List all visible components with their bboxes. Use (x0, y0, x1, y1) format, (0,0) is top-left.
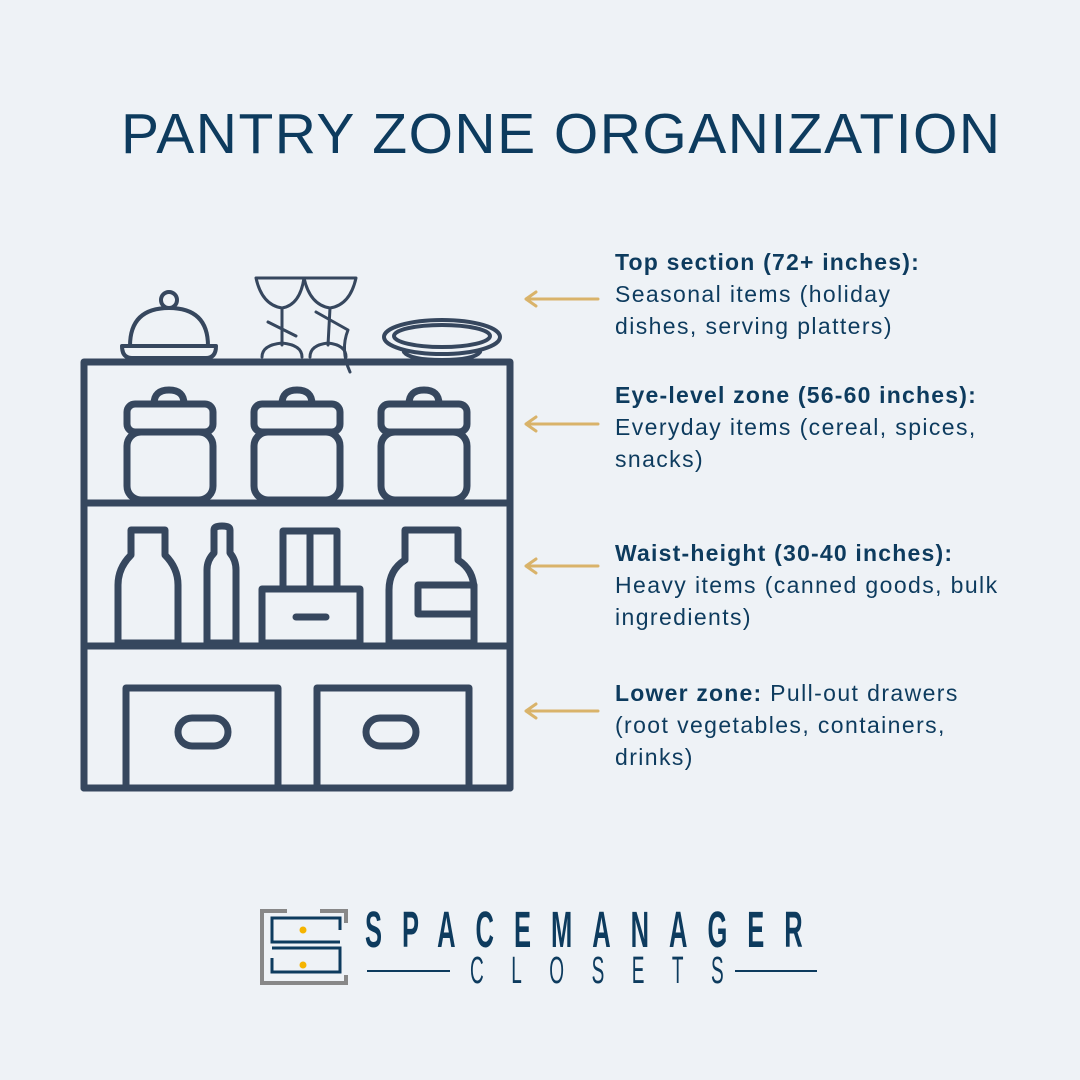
shelf frame (84, 362, 510, 788)
text: eye-level zone (615, 382, 977, 472)
text: eye-level zone: Everyday items (cereal, spices, (615, 414, 977, 440)
icon: cloche (122, 292, 216, 358)
icon: glasses (256, 278, 356, 372)
logo (260, 901, 823, 992)
icon: plate (384, 320, 500, 360)
text: waist-height: ingredients) (615, 604, 752, 630)
text: top section: dishes, serving platters) (615, 313, 893, 339)
text: lower zone: Lower zone: Pull-out drawers (615, 680, 959, 706)
text: lower zone (615, 680, 959, 770)
text: top section: Seasonal items (holiday (615, 281, 891, 307)
bottles and boxes (118, 526, 474, 643)
text: eye-level zone: snacks) (615, 446, 704, 472)
text: waist-height: Heavy items (canned goods, bulk (615, 572, 998, 598)
text: eye-level zone: Eye-level zone (56-60 inches): (615, 382, 977, 408)
text: top section (615, 249, 920, 339)
title: PANTRY ZONE ORGANIZATION (121, 102, 1002, 166)
text: lower zone: drinks) (615, 744, 694, 770)
drawers (126, 688, 469, 788)
logo text: SPACEMANAGER (365, 901, 823, 958)
arrows (526, 292, 598, 718)
text: lower zone: (root vegetables, containers, (615, 712, 946, 738)
jars (127, 390, 467, 500)
text: top section: Top section (72+ inches): (615, 249, 920, 275)
logo: CLOSETS (470, 950, 751, 992)
text: waist-height: Waist-height (30-40 inches): (615, 540, 953, 566)
text: waist-height (615, 540, 998, 630)
logo icon (260, 909, 348, 985)
